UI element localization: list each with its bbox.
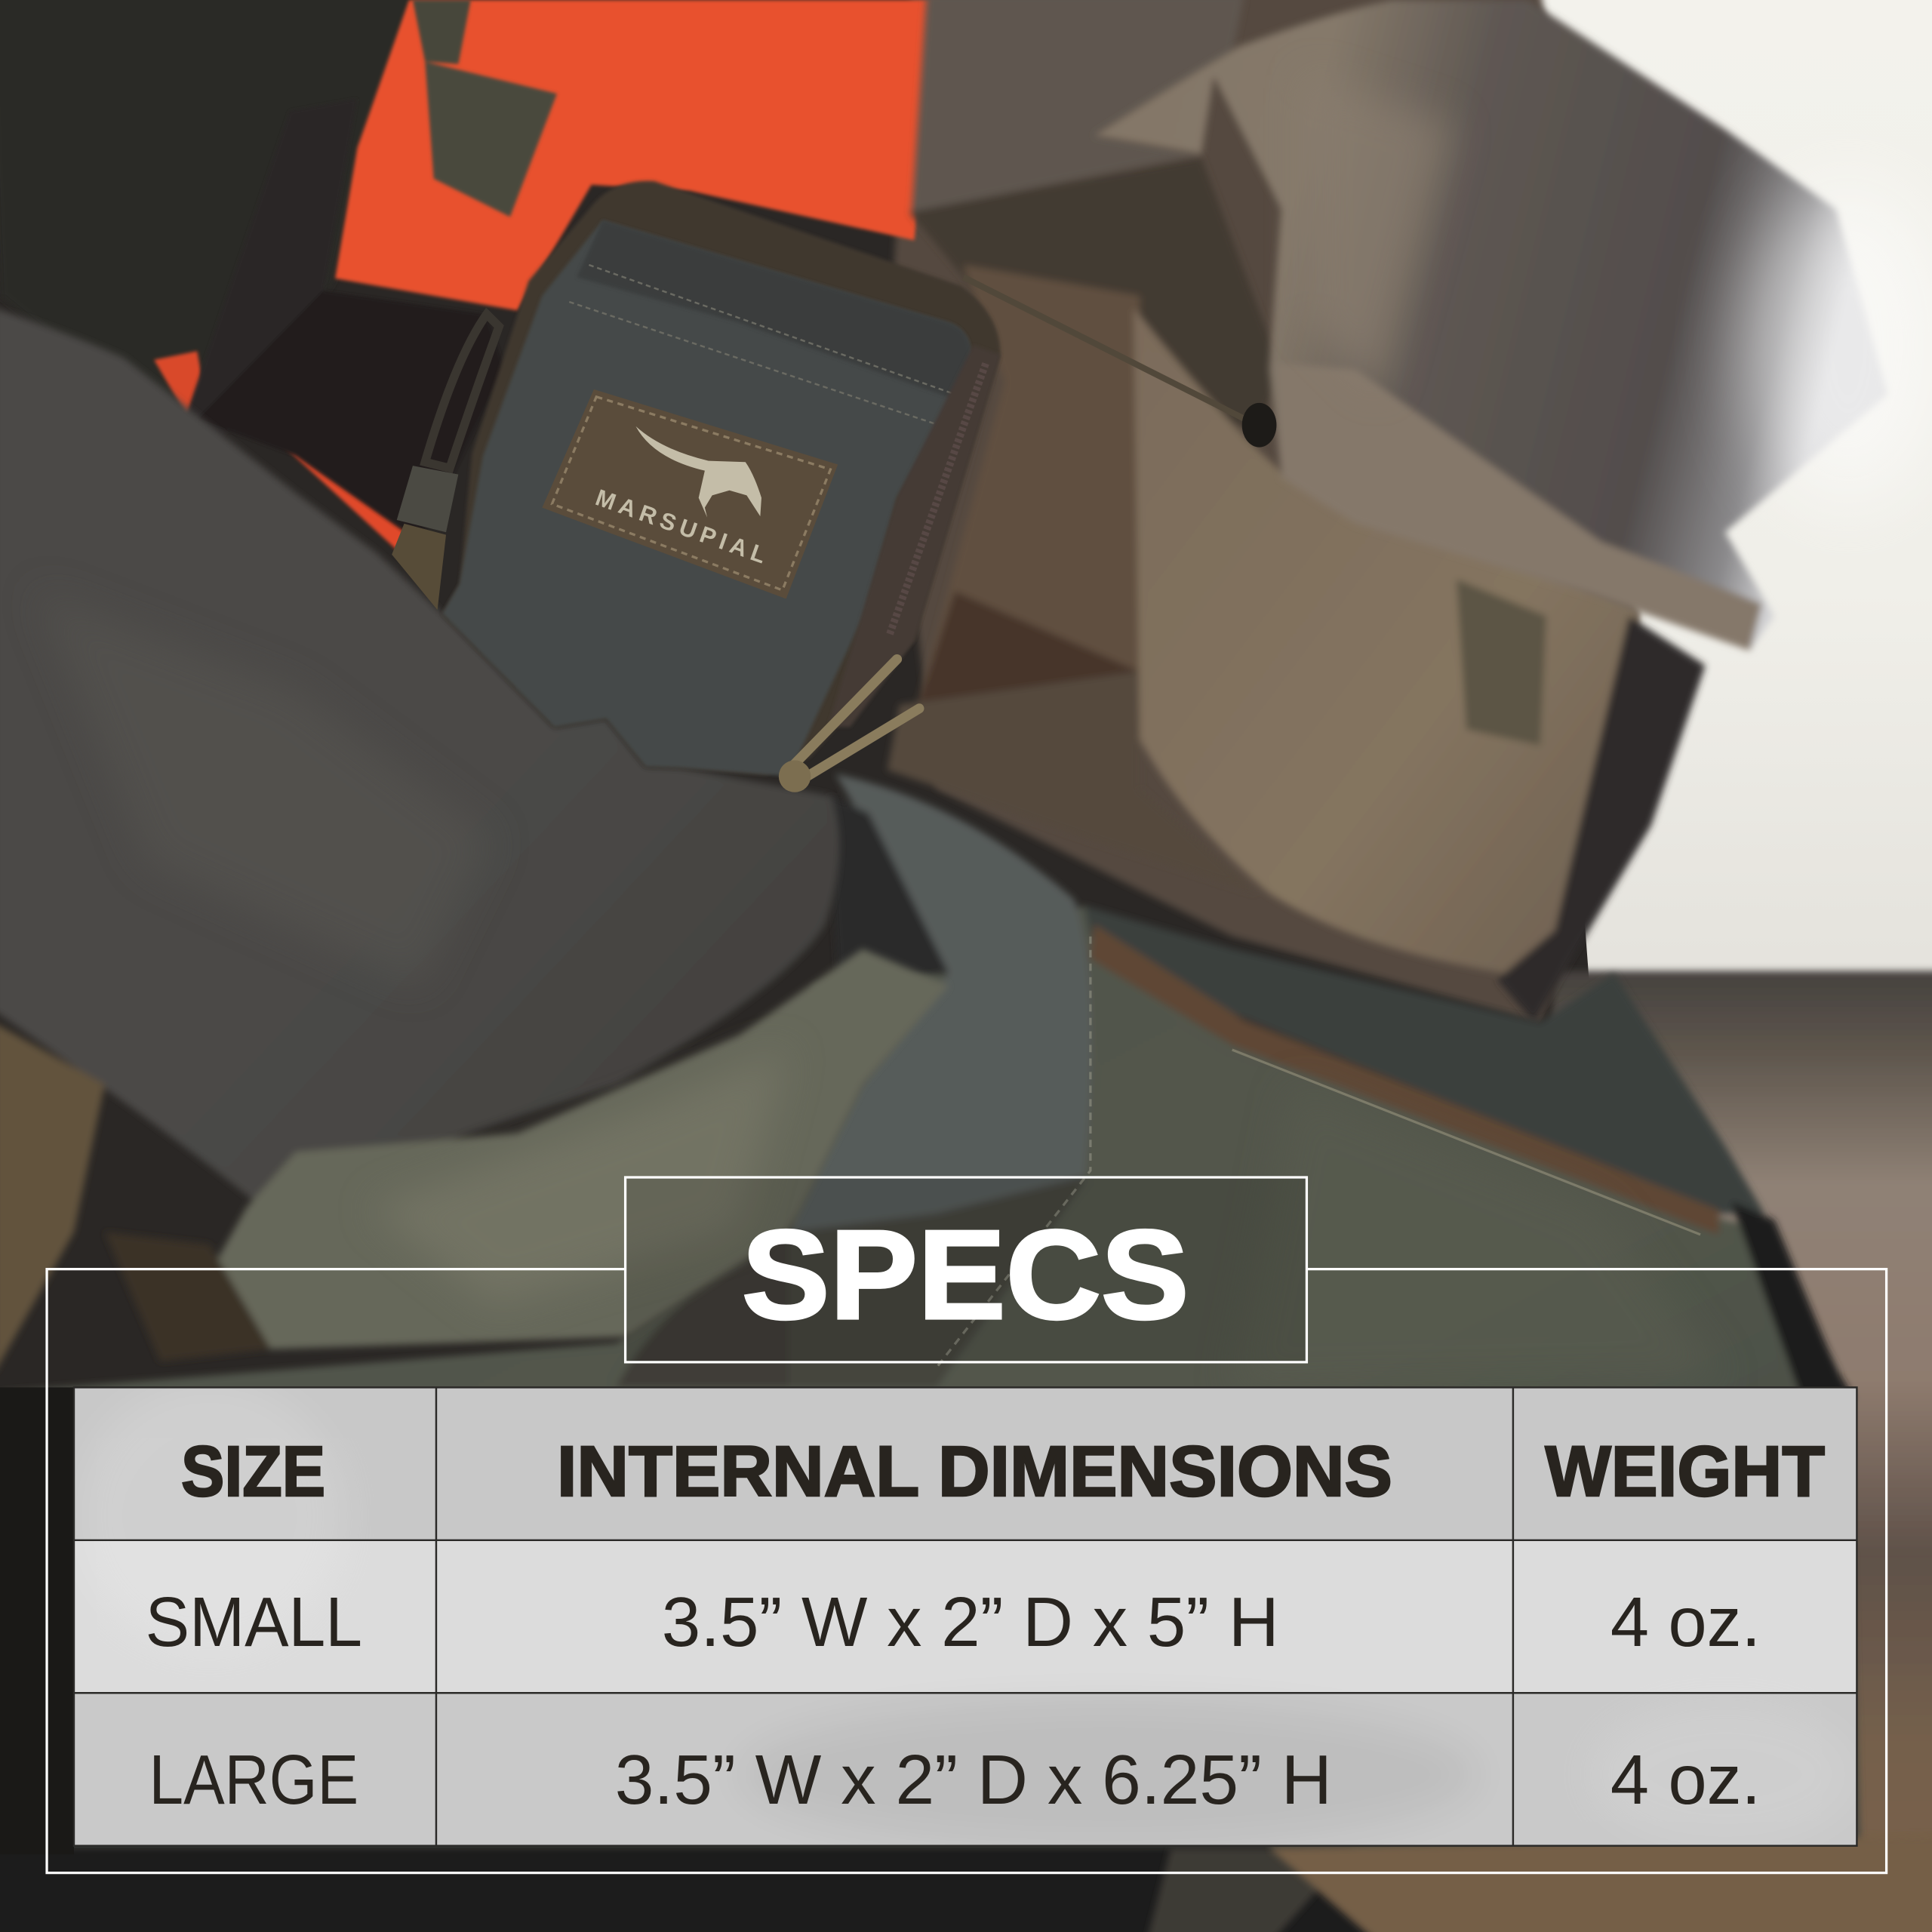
header: size: SIZE	[181, 1432, 325, 1512]
shock cord	[964, 277, 1257, 425]
outer white frame	[47, 1269, 1887, 1873]
pouch shell	[442, 181, 1001, 775]
icon: kangaroo	[635, 426, 761, 518]
large: dimensions: 3.5” W x 2” D x 6.25” H	[615, 1740, 1332, 1819]
large row	[74, 1693, 1857, 1846]
left arm jacket	[0, 308, 949, 1374]
header: weight: WEIGHT	[1545, 1432, 1825, 1512]
header row	[74, 1387, 1857, 1540]
faint photo show-through	[769, 1716, 1449, 1832]
large: weight: 4 oz.	[1611, 1740, 1761, 1819]
small: dimensions: 3.5” W x 2” D x 5” H	[662, 1583, 1279, 1661]
zipper side	[828, 345, 1001, 727]
zipper pull	[392, 314, 499, 610]
pack base behind flap	[888, 0, 1638, 1023]
landscape	[1552, 971, 1932, 1932]
bottom of image shading	[0, 1846, 1380, 1932]
pouch	[392, 181, 1276, 792]
label text: MARSUPIAL	[592, 484, 769, 568]
header: internal dimensions: INTERNAL DIMENSIONS	[557, 1432, 1392, 1512]
small row	[74, 1540, 1857, 1693]
small: size: SMALL	[146, 1583, 362, 1661]
glare	[1749, 185, 1932, 505]
cord ends	[789, 659, 919, 779]
tan pack body	[888, 0, 1706, 1023]
seam stitching	[937, 937, 1091, 1367]
soft highlights on jacket	[37, 74, 1725, 1392]
large: size: LARGE	[149, 1740, 358, 1819]
pouch top pocket	[577, 220, 971, 401]
title: SPECS	[742, 1204, 1189, 1346]
dark pack at upper left	[0, 0, 419, 456]
zipper edge highlight	[1232, 1050, 1700, 1235]
pouch front panel	[442, 220, 971, 777]
table grid lines	[74, 1387, 1857, 1846]
pouch stitching	[569, 265, 955, 425]
lower pack: green panel	[0, 774, 1860, 1860]
small: weight: 4 oz.	[1611, 1583, 1761, 1661]
title box	[626, 1177, 1306, 1362]
leather flap	[1094, 0, 1887, 651]
cord knot	[779, 760, 811, 792]
cord eyelet	[1242, 403, 1276, 448]
red shirt	[154, 0, 939, 555]
sky	[1515, 0, 1932, 986]
shoulder straps	[185, 0, 557, 542]
specs table	[74, 1380, 1860, 1848]
label patch	[542, 389, 838, 598]
